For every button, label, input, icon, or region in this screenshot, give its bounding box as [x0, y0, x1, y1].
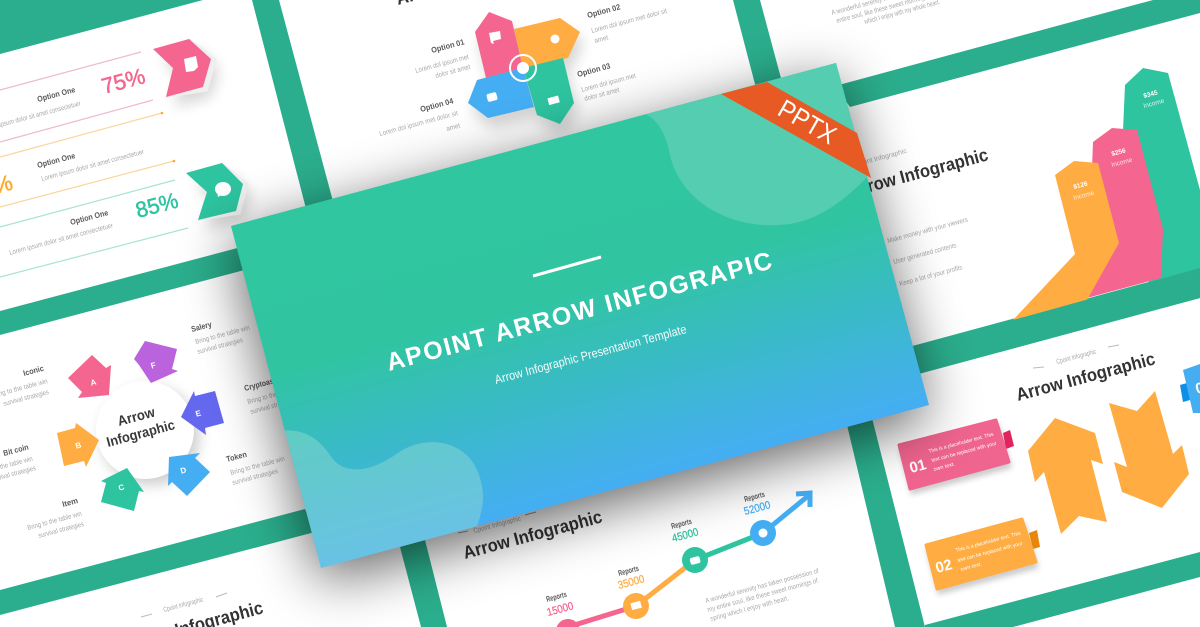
stat: 85%: 85% — [133, 188, 181, 223]
label: option 03: Lorem dol ipsum met — [581, 73, 637, 94]
subtitle: Arrow Infographic Presentation Template — [493, 322, 688, 387]
report values: Reports — [617, 564, 640, 578]
label: salery: Bring to the table win — [195, 325, 251, 346]
label: option one: Lorem ipsum dolor sit amet consectetuer — [9, 222, 114, 257]
card: 02: text can be replaced with your — [957, 541, 1023, 564]
text block: serenity paragraph: spring which I enjoy with heart. — [710, 595, 790, 623]
arrow labels: $345 — [1143, 89, 1159, 100]
heading: Arrow Infographic — [461, 507, 604, 563]
label: iconic: Iconic — [22, 364, 45, 378]
panel: four petal diagram — [379, 0, 668, 138]
label: token — [225, 450, 286, 487]
centre ring — [510, 55, 536, 81]
label: salery: survival strategies — [197, 337, 244, 356]
card: 02 — [926, 519, 1040, 595]
ribbon: PPTX: PPTX — [773, 93, 842, 150]
label: option 01 — [415, 37, 471, 80]
arrow: D — [168, 453, 210, 496]
arrow letters: C — [117, 482, 126, 493]
heading: Cpoint Infographic — [1056, 348, 1097, 366]
petal: orange — [514, 18, 580, 68]
label: option 02: Lorem dol ipsum met dolor sit — [591, 8, 668, 35]
label: cryptoasset: survival strategies — [250, 397, 297, 416]
report values: 15000 — [546, 600, 575, 619]
label: option 03 — [576, 61, 637, 103]
arrow labels: Income — [1073, 190, 1095, 202]
petal icons — [486, 31, 560, 105]
label: option 04 — [379, 96, 461, 138]
report values: Reports — [545, 590, 568, 604]
label: option one: ipsum dolor sit amet consectetuer — [0, 100, 82, 129]
label: cryptoasset — [243, 374, 303, 416]
label: option 01: Option 01 — [430, 37, 466, 55]
report values: 35000 — [617, 573, 646, 592]
arrow: C — [101, 468, 144, 511]
centre circle: Arrow — [116, 404, 157, 429]
panel: up and down arrows — [899, 345, 1200, 595]
panel: rising arrows — [847, 68, 1200, 352]
centre circle — [96, 381, 199, 485]
label: option 04: Option 04 — [419, 96, 455, 114]
label: token: Token — [225, 450, 248, 464]
panel: percentage options — [0, 39, 251, 277]
petal shadow — [472, 22, 584, 134]
bullet list — [887, 217, 969, 288]
label: item: Item — [61, 496, 79, 509]
blob: top right — [646, 63, 867, 226]
heading: Cpoint Infographic — [853, 148, 908, 169]
arrow: orange — [1013, 161, 1119, 320]
label: item — [27, 496, 85, 540]
panel: bottom left heading: Cpoint Infographic — [163, 596, 204, 614]
centre circle: Infographic — [105, 416, 177, 450]
label: option 02: Option 02 — [586, 2, 622, 20]
label: option 01: Lorem dol ipsum met — [415, 54, 470, 75]
heading: Arrow Infographic — [847, 145, 990, 201]
label: bit coin: Bit coin — [2, 442, 30, 458]
arrow: down — [1109, 391, 1189, 508]
card: 02: This is a placeholder text. This — [955, 531, 1022, 554]
label: bit coin — [0, 442, 37, 484]
text block: serenity paragraph: A wonderful serenity has taken possession of — [705, 568, 820, 605]
label: option one: Option One — [36, 151, 77, 170]
percentage divider lines — [0, 52, 188, 277]
label: token: survival strategies — [232, 468, 279, 487]
label: item: survival strategies — [38, 521, 85, 540]
card: 02: own text. — [960, 561, 983, 573]
arrow labels: $256 — [1111, 147, 1127, 158]
label: option 04: amet — [446, 123, 461, 133]
label: cryptoasset: Bring to the table win — [247, 385, 303, 406]
arrow: pink — [1087, 128, 1163, 298]
arrow: A — [68, 355, 111, 398]
card: 01: This is a placeholder text. This — [928, 432, 995, 455]
petal: pink — [475, 12, 523, 78]
label: option 04: Lorem dol ipsum met dolor sit — [379, 110, 459, 138]
text block: serenity paragraph — [705, 568, 820, 623]
arrow letters: A — [89, 377, 98, 388]
slide drop shadow — [231, 77, 929, 582]
panel: arrow cycle — [0, 320, 303, 540]
arrow: teal — [1120, 68, 1200, 285]
title: APOINT ARROW INFOGRAPIC — [383, 247, 775, 377]
petal: blue — [468, 68, 534, 118]
title rule — [533, 257, 601, 276]
panel: report growth line — [458, 490, 820, 627]
report values: 52000 — [743, 499, 772, 518]
stat: 75%: 75% — [99, 63, 148, 99]
growth line — [568, 493, 810, 627]
node markers — [556, 520, 776, 627]
ribbon: PPTX — [721, 82, 871, 178]
label: option one — [0, 85, 82, 129]
arrow: B — [57, 423, 99, 467]
label: token: Bring to the table win — [230, 456, 286, 477]
arrow: F — [134, 341, 178, 383]
arrow letters: E — [195, 408, 203, 419]
report values: 45000 — [671, 526, 700, 545]
arrow labels — [1073, 89, 1165, 202]
slide background — [231, 63, 929, 568]
bullet list: User generated contents — [893, 242, 958, 266]
label: option one: Option One — [36, 85, 77, 104]
petal: teal — [523, 58, 574, 124]
card: 01 — [899, 420, 1014, 495]
label: option 03: dolor sit amet — [584, 87, 620, 103]
bullet list: Keep a lot of your profits — [899, 264, 964, 288]
icon: pink arrow badge — [153, 39, 219, 107]
card: 01: own text. — [933, 461, 956, 473]
icon: teal arrow badge — [186, 163, 251, 230]
arrow: E — [181, 391, 224, 435]
arrow labels: Income — [1111, 157, 1133, 169]
heading: Cpoint Infographic — [473, 515, 522, 535]
label: iconic — [0, 364, 50, 408]
arrow labels: $126 — [1073, 180, 1089, 191]
label: salery: Salery — [190, 320, 213, 334]
arrow: up — [1028, 418, 1107, 534]
label: option 03: Option 03 — [576, 61, 612, 79]
blob: bottom left — [285, 430, 483, 568]
arrow letters: D — [179, 465, 188, 476]
arrow letters: B — [74, 440, 83, 451]
label: option one: Option One — [69, 208, 110, 227]
arrow letters — [74, 361, 203, 493]
label: option 02 — [586, 2, 668, 45]
label: cryptoasset: Cryptoasset — [243, 374, 284, 393]
report values: Reports — [743, 490, 766, 504]
band overlap — [1000, 268, 1200, 352]
card: blue partial — [1180, 364, 1200, 413]
label: option one: Lorem ipsum dolor sit amet consectetuer — [41, 149, 145, 183]
label: item: Bring to the table win — [27, 511, 83, 532]
label: iconic: survival strategies — [3, 389, 50, 408]
arrow letters: F — [150, 361, 157, 371]
card: 01: text can be replaced with your — [931, 441, 997, 464]
report values: Reports — [670, 517, 693, 531]
text block: serenity paragraph: my entire soul, like these sweet mornings of — [707, 578, 819, 614]
heading: Arrow Infographic — [1014, 349, 1157, 405]
card: 01: 01 — [908, 456, 928, 477]
card: 02: 02 — [934, 556, 954, 577]
label: option 01: dolor sit amet — [435, 64, 471, 80]
label: option 02: amet — [594, 35, 609, 45]
arrow labels: Income — [1143, 98, 1165, 110]
panel: central title slide — [231, 50, 929, 590]
bullet list: Make money with your viewers — [887, 217, 969, 245]
label: salery — [190, 320, 251, 356]
report values — [545, 490, 772, 619]
